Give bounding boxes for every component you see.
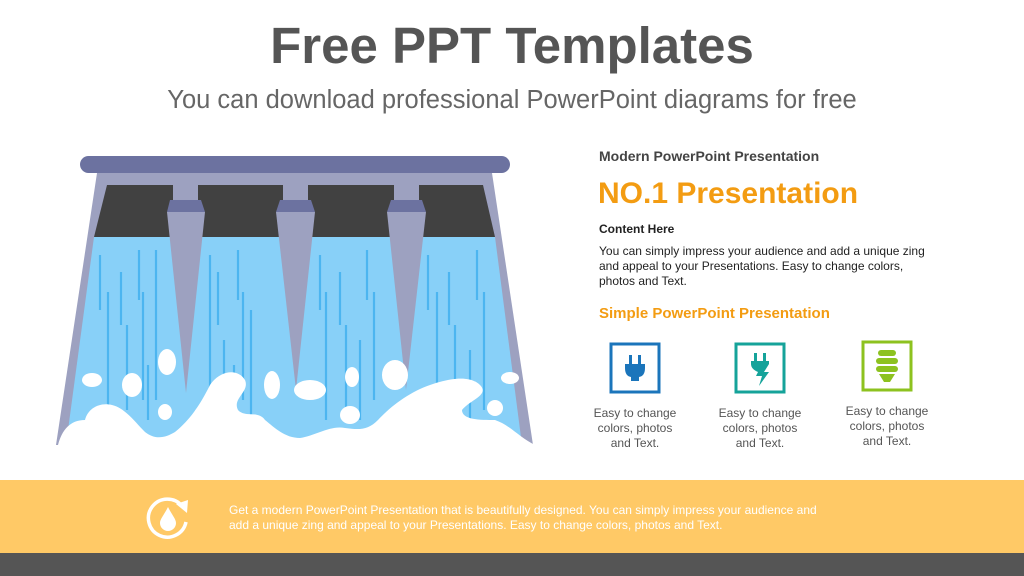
dam illustration xyxy=(56,156,533,445)
icon item 3: Easy to change colors, photos and Text. xyxy=(846,404,928,448)
splash xyxy=(58,349,535,445)
footer text: Get a modern PowerPoint Presentation that is beautifully designed. You can simply impress your audience and add a unique zing and appeal to your Presentations. Easy to change colors, photos and Text. xyxy=(229,503,817,532)
title: Free PPT Templates xyxy=(270,17,754,74)
icon item 3 xyxy=(846,340,928,448)
subtitle: You can download professional PowerPoint diagrams for free xyxy=(167,86,857,114)
icon item 2: Easy to change colors, photos and Text. xyxy=(719,406,801,450)
water streaks xyxy=(100,250,484,420)
text block: NO.1: NO.1 Presentation xyxy=(598,177,858,210)
bottom bar xyxy=(0,553,1024,576)
text block: content: You can simply impress your audience and add a unique zing and appeal to your Presentations. Easy to change colors, photos and Text. xyxy=(599,244,925,288)
text block: heading: Modern PowerPoint Presentation xyxy=(599,148,819,164)
icon: water cycle xyxy=(146,497,188,539)
spillway pillars xyxy=(167,184,426,393)
icon item 2 xyxy=(719,342,801,450)
text block: content xyxy=(599,222,925,288)
subheading: Simple PowerPoint Presentation xyxy=(599,305,830,322)
icon item 1 xyxy=(594,342,676,450)
footer banner xyxy=(0,480,1024,553)
text block: content: Content Here xyxy=(599,222,674,236)
dam body xyxy=(56,156,533,445)
icon item 1: Easy to change colors, photos and Text. xyxy=(594,406,676,450)
